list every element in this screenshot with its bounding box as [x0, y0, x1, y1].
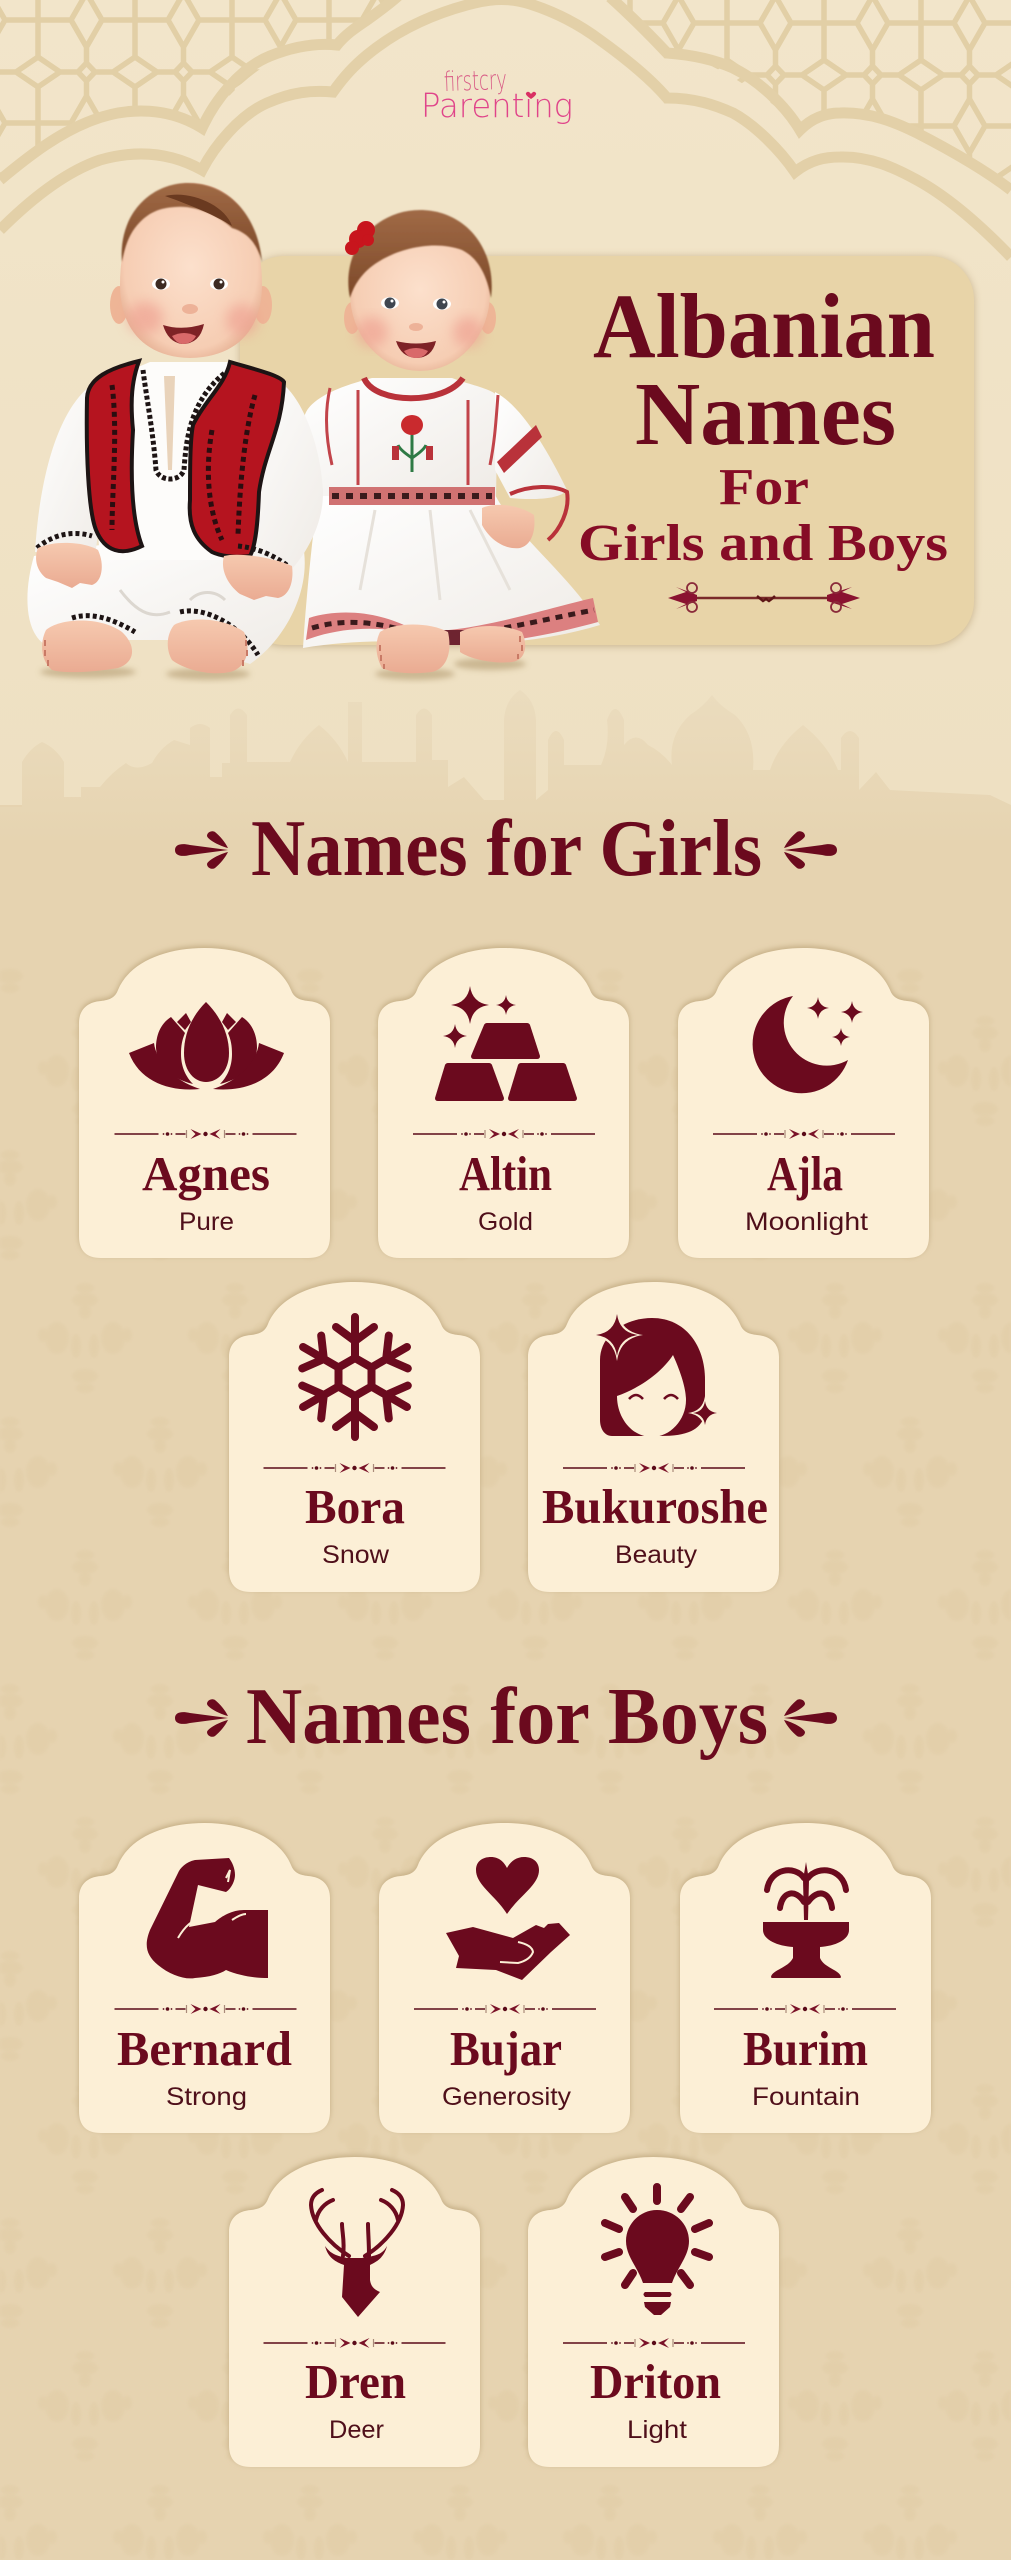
girl hem pattern — [312, 610, 594, 636]
card: Bujar — [379, 1821, 630, 2133]
boy toes — [45, 640, 247, 666]
card: Bora — [229, 1280, 480, 1592]
title line: Girls and Boys: Girls and Boys — [578, 515, 948, 572]
name: Burim — [743, 2021, 868, 2076]
meaning: Strong — [166, 2083, 247, 2111]
title line: Names: Names — [635, 365, 896, 464]
boy hands — [36, 543, 102, 588]
baby girl — [303, 210, 600, 673]
boy placket — [164, 376, 175, 470]
name: Bukuroshe — [542, 1479, 768, 1534]
girl eyes — [381, 297, 451, 310]
card: Bukuroshe — [528, 1280, 779, 1592]
divider — [114, 1129, 296, 1139]
meaning: Gold — [478, 1208, 533, 1236]
lattice: top left — [0, 0, 384, 173]
title line: Albanian: Albanian — [593, 275, 935, 377]
boy eyes — [152, 278, 228, 290]
name: Ajla — [767, 1146, 843, 1201]
name: Dren — [305, 2354, 406, 2409]
meaning: Generosity — [442, 2083, 572, 2111]
boy hair strands — [165, 195, 232, 226]
title ornament — [668, 583, 860, 612]
card: Bernard — [79, 1821, 330, 2133]
heading text: Names for Boys — [246, 1673, 768, 1761]
girl waist band — [329, 487, 495, 505]
divider — [264, 1463, 446, 1473]
boy ears — [110, 286, 128, 324]
divider — [264, 2338, 446, 2348]
girl flower embroidery — [392, 415, 433, 472]
divider — [114, 2004, 296, 2014]
card: Ajla — [678, 946, 929, 1258]
icon: lotus — [129, 1002, 284, 1090]
heading: Names for Boys — [175, 1673, 837, 1761]
meaning: Pure — [179, 1208, 234, 1236]
boy cheeks — [127, 302, 258, 336]
boy mouth — [163, 324, 204, 344]
logo: FirstCry Parenting: firstcry — [443, 65, 507, 98]
boy trouser folds — [120, 590, 225, 615]
heading: Names for Girls — [175, 805, 837, 893]
girl mouth — [396, 341, 436, 358]
boy cuff embroidery — [37, 533, 288, 655]
girl hair — [348, 210, 492, 298]
girl sleeve band — [497, 425, 542, 473]
arch lines — [0, 0, 1011, 257]
title block — [578, 275, 948, 612]
boy neck embroidery — [143, 370, 226, 479]
boy hair — [122, 183, 262, 262]
icon: flexed arm — [147, 1858, 268, 1978]
girl hand — [482, 505, 534, 548]
ground shadow — [40, 658, 526, 680]
ornament right — [784, 1699, 837, 1737]
meaning: Snow — [322, 1541, 390, 1569]
title line: For: For — [719, 459, 809, 516]
icon: snowflake — [294, 1317, 416, 1437]
background damask pattern — [0, 960, 1011, 2560]
boy vest left — [87, 361, 142, 551]
illustration: two babies in traditional dress — [27, 183, 600, 680]
boy vest embroidery — [112, 385, 255, 540]
meaning: Fountain — [752, 2083, 860, 2111]
divider — [563, 1463, 745, 1473]
name: Bernard — [117, 2021, 292, 2076]
name: Bora — [305, 1479, 405, 1534]
girl waist pattern — [332, 493, 492, 499]
logo: FirstCry Parenting — [421, 65, 573, 125]
girl dress vertical trim — [326, 388, 498, 485]
girl skirt — [303, 495, 600, 648]
meaning: Beauty — [615, 1541, 698, 1569]
ornament left — [175, 1699, 228, 1737]
card: Altin — [378, 946, 629, 1258]
icon: light bulb — [605, 2187, 709, 2315]
divider — [413, 1129, 595, 1139]
girl collar — [364, 378, 463, 398]
boy shirt body — [88, 362, 286, 560]
girl head — [350, 215, 490, 371]
heading text: Names for Girls — [251, 805, 762, 893]
girl feet — [376, 624, 449, 673]
divider — [414, 2004, 596, 2014]
boy left sleeve — [35, 386, 110, 556]
icon: deer head — [311, 2190, 403, 2317]
ornament right — [784, 831, 837, 869]
ornament left — [175, 831, 228, 869]
name: Driton — [590, 2354, 721, 2409]
boy nose — [182, 304, 198, 314]
divider — [713, 1129, 895, 1139]
boy right sleeve — [232, 382, 323, 570]
icon: crescent moon and stars — [753, 996, 863, 1093]
boy feet — [42, 620, 132, 672]
girl flower — [345, 221, 375, 255]
girl toes — [380, 636, 522, 669]
boy head — [120, 183, 262, 358]
icon: fountain — [763, 1862, 849, 1978]
girl skirt folds — [360, 510, 510, 600]
icon: hand and heart — [446, 1857, 570, 1980]
card: Dren — [229, 2155, 480, 2467]
baby boy — [27, 183, 323, 673]
girl underwear — [413, 630, 477, 645]
girl nose — [409, 323, 423, 331]
girl ears — [344, 302, 360, 334]
skyline silhouette — [0, 690, 1011, 840]
icon: woman face with sparkles — [591, 1309, 722, 1437]
card: Agnes — [79, 946, 330, 1258]
girl hem band — [306, 598, 598, 644]
lattice: top right — [627, 0, 1011, 177]
icon: gold bars — [435, 986, 577, 1101]
girl cuff — [510, 487, 568, 540]
girl bodice — [304, 378, 498, 496]
name: Agnes — [142, 1146, 270, 1201]
name: Bujar — [450, 2021, 562, 2076]
card: Driton — [528, 2155, 779, 2467]
boy trousers — [27, 545, 305, 664]
divider — [714, 2004, 896, 2014]
meaning: Light — [627, 2416, 687, 2444]
girl sleeve — [495, 392, 567, 499]
name: Altin — [459, 1146, 552, 1201]
divider — [563, 2338, 745, 2348]
girl cheeks — [356, 317, 483, 347]
meaning: Moonlight — [745, 1208, 868, 1236]
card: Burim — [680, 1821, 931, 2133]
meaning: Deer — [329, 2416, 384, 2444]
panel: title background — [240, 256, 974, 645]
logo: FirstCry Parenting: Parenting — [421, 86, 573, 125]
boy vest right — [190, 362, 284, 557]
